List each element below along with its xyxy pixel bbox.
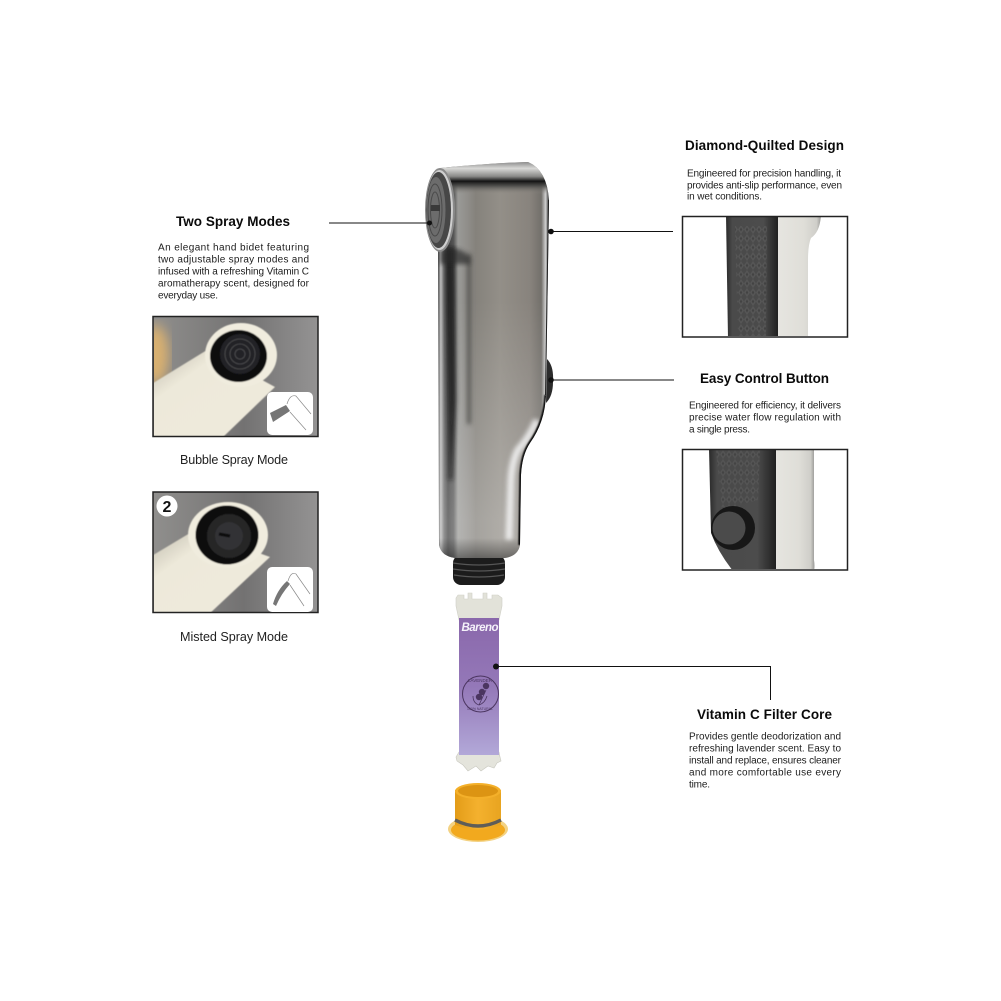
lavender seal <box>462 676 498 712</box>
callout line: filter core <box>493 664 770 700</box>
text block: filter core description <box>689 732 842 790</box>
panel: control button close-up <box>682 448 848 571</box>
text block: filter core description: Provides gentle deodorization and <box>689 732 841 742</box>
filter top cap <box>456 593 502 620</box>
thread connector <box>453 555 505 585</box>
caption: Bubble Spray Mode: Bubble Spray Mode <box>180 453 288 467</box>
text block: diamond quilted description: Engineered for precision handling, it <box>687 168 841 180</box>
control button side <box>546 359 553 403</box>
text block: two spray modes description: two adjustable spray modes and <box>158 254 309 266</box>
text block: two spray modes description: An elegant hand bidet featuring <box>158 242 309 254</box>
text block: filter core description: time. <box>689 780 710 790</box>
badge: number 2 <box>156 496 178 516</box>
icon: misted spray mode <box>267 567 313 612</box>
text block: filter core description: refreshing lavender scent. Easy to <box>689 744 841 754</box>
lavender seal: 100% NATURAL <box>467 707 493 711</box>
product: hand bidet sprayer <box>425 158 553 585</box>
text block: filter core description: and more comfortable use every <box>689 768 841 778</box>
callout line: quilted design <box>548 229 673 234</box>
callout line: control button <box>548 377 674 383</box>
product: vitamin C filter core <box>448 593 508 842</box>
orange filter cap <box>448 783 508 842</box>
infographic canvas <box>152 140 848 842</box>
text block: two spray modes description <box>158 242 310 302</box>
text block: diamond quilted description <box>687 168 842 202</box>
heading: Vitamin C Filter Core: Vitamin C Filter Core <box>697 707 832 722</box>
text block: two spray modes description: infused with a refreshing Vitamin C <box>158 266 309 278</box>
caption: Misted Spray Mode: Misted Spray Mode <box>180 630 288 644</box>
panel: misted spray photo <box>150 492 318 616</box>
callout line: spray modes <box>329 220 432 226</box>
panel: diamond quilted close-up <box>682 215 848 338</box>
sprayer body <box>436 158 552 560</box>
text block: control button description: precise water flow regulation with <box>689 412 841 424</box>
text block: diamond quilted description: in wet conditions. <box>687 192 762 202</box>
text block: filter core description: install and replace, ensures cleaner <box>689 756 842 766</box>
filter label sleeve <box>459 618 499 755</box>
spray head face <box>425 168 455 252</box>
text block: two spray modes description: everyday use. <box>158 290 218 302</box>
heading: Two Spray Modes: Two Spray Modes <box>176 214 290 229</box>
filter lower cap <box>456 752 501 771</box>
text block: diamond quilted description: provides anti-slip performance, even <box>687 180 842 192</box>
lavender seal: LAVENDER <box>468 678 493 683</box>
text block: control button description: a single press. <box>689 424 750 436</box>
brand label: Bareno <box>462 622 498 634</box>
text block: control button description: Engineered for efficiency, it delivers <box>689 400 841 412</box>
icon: bubble spray mode <box>267 392 313 435</box>
panel: bubble spray photo <box>141 316 318 440</box>
text block: two spray modes description: aromatherapy scent, designed for <box>158 278 310 290</box>
heading: Easy Control Button: Easy Control Button <box>700 371 829 386</box>
text block: control button description <box>689 400 841 436</box>
heading: Diamond-Quilted Design: Diamond-Quilted Design <box>685 138 844 153</box>
badge: number 2: 2 <box>163 499 172 516</box>
